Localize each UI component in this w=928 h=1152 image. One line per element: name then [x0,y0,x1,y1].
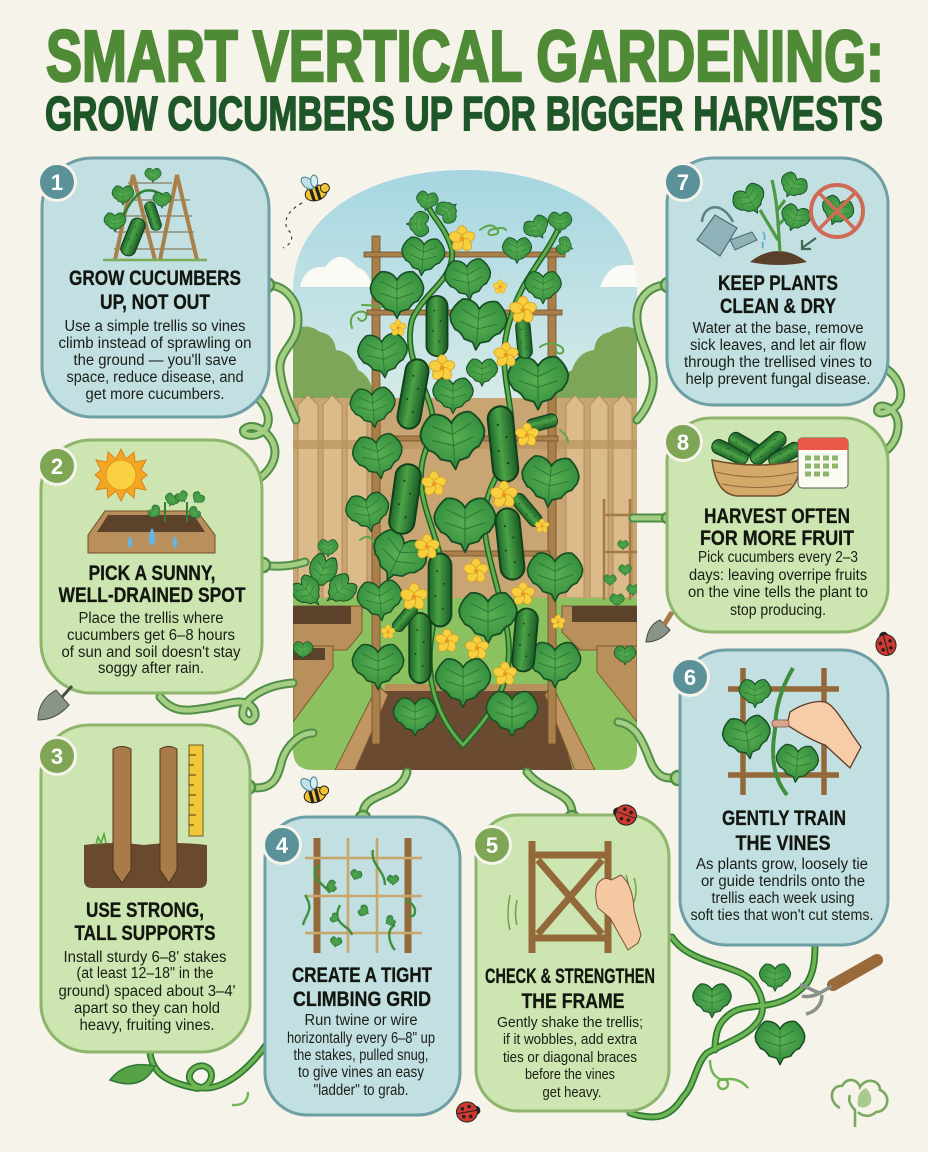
panel 7 [664,158,888,405]
icon: watering can, plant, no-disease sign [697,169,863,265]
panel 1 [38,158,269,417]
text block: if it wobbles, add extra [503,1032,638,1048]
heading: GENTLY TRAIN [722,806,846,830]
text block: heavy, fruiting vines. [80,1017,214,1034]
icon: sun and raised bed [88,449,215,553]
text block [287,1012,435,1099]
title [45,17,884,141]
badge 6: 6 [684,665,696,690]
text block: As plants grow, loosely tie [696,856,868,873]
text block [684,320,872,388]
connector vines [160,278,901,825]
text block: the stakes, pulled snug, [294,1047,428,1064]
heading [722,806,846,855]
text block: Place the trellis where [78,610,224,627]
heading: PICK A SUNNY, [88,561,216,585]
badge 1 [38,164,76,200]
panel 8 [664,418,888,632]
icon: stakes and ruler [84,745,207,888]
heading: WELL-DRAINED SPOT [58,583,246,607]
panel 4 [264,817,460,1115]
badge 7 [664,164,702,200]
badge 8: 8 [677,430,689,455]
cucumbers [388,296,559,683]
panel 5 [474,815,669,1111]
text block: sick leaves, and let air flow [690,337,867,354]
badge 5: 5 [486,833,498,858]
text block [497,1015,643,1101]
text block: get more cucumbers. [86,386,224,403]
icon: logo sprout [832,1080,887,1127]
text block: (at least 12–18" in the [76,965,214,982]
icon: trellis with cucumbers [103,168,207,260]
text block: space, reduce disease, and [66,369,244,386]
badge 7: 7 [677,170,689,195]
text block: cucumbers get 6–8 hours [67,627,235,644]
text block: the ground — you'll save [74,352,236,369]
panel 2 [38,440,262,693]
text block: of sun and soil doesn't stay [62,644,241,661]
heading [485,964,655,1013]
heading: UP, NOT OUT [100,290,210,314]
text block: Install sturdy 6–8' stakes [64,949,227,966]
badge 4: 4 [276,833,289,858]
panel 6 [672,650,888,945]
heading [74,898,216,945]
heading [700,504,854,550]
heading: CLEAN & DRY [720,294,836,318]
panel 3 [38,725,250,1052]
icon: hand tying vine to trellis [721,668,861,795]
text block: soft ties that won't cut stems. [690,907,874,924]
icon: trowel right [646,612,672,642]
trellis [364,236,565,744]
badge 8 [664,424,702,460]
icon: ladybug right [873,629,898,658]
text block: soggy after rain. [98,660,204,677]
heading: HARVEST OFTEN [704,504,850,528]
icon: twine grid [303,838,422,953]
heading: TALL SUPPORTS [74,921,216,945]
text block: Pick cucumbers every 2–3 [698,549,858,566]
icon: hand cultivator tool [800,960,877,1014]
tendrils [351,225,568,544]
heading: FOR MORE FRUIT [700,526,854,550]
text block: days: leaving overripe fruits [689,567,867,584]
icon: ladybug bottom [455,1100,482,1124]
text block [58,318,252,403]
badge 3: 3 [51,744,63,769]
icon: braced frame and hand [508,841,641,953]
badge 2 [38,448,76,484]
icon: trowel left [38,686,72,720]
icon: bee top with dotted trail [283,169,332,248]
heading [69,266,241,314]
text block: "ladder" to grab. [314,1082,408,1099]
leaves [344,190,583,737]
badge 4 [264,826,300,864]
heading [292,963,432,1011]
text block: Use a simple trellis so vines [64,318,246,335]
text block: horizontally every 6–8" up [287,1030,435,1047]
badge 2: 2 [51,454,63,479]
heading [58,561,246,607]
text block: through the trellised vines to [684,354,872,371]
text block: on the vine tells the plant to [688,584,868,601]
heading [718,271,838,318]
text block: ties or diagonal braces [503,1050,637,1066]
heading: THE VINES [736,831,830,855]
text block [688,549,868,619]
text block: trellis each week using [712,890,854,907]
vines [410,205,560,745]
text block: Water at the base, remove [692,320,864,337]
text block: Gently shake the trellis; [497,1015,643,1031]
text block: climb instead of sprawling on [58,335,252,352]
badge 5 [474,826,510,864]
flowers [380,226,566,686]
heading: THE FRAME [522,989,624,1013]
text block: apart so they can hold [74,1000,220,1017]
text block: before the vines [525,1067,615,1083]
text block: get heavy. [542,1085,602,1101]
heading: CLIMBING GRID [293,987,431,1011]
text block [690,856,874,924]
badge 3 [38,738,76,774]
text block: to give vines an easy [298,1064,424,1081]
text block: stop producing. [730,602,826,619]
central illustration: cucumber trellis in garden [288,170,639,770]
lower vines with leaves [110,937,815,1117]
heading: CHECK & STRENGTHEN [485,964,655,988]
text block: or guide tendrils onto the [701,873,865,890]
text block [62,610,241,677]
text block: Run twine or wire [304,1012,418,1029]
heading: CREATE A TIGHT [292,963,432,987]
heading: KEEP PLANTS [718,271,838,295]
text block [58,949,236,1034]
badge 6 [672,658,708,696]
text block: ground) spaced about 3–4' [58,983,236,1000]
heading: USE STRONG, [86,898,204,922]
icon: basket and calendar [710,429,848,496]
text block: help prevent fungal disease. [686,371,870,388]
icon: ladybug top of panel 5 [610,801,639,828]
badge 1: 1 [51,170,63,195]
heading: GROW CUCUMBERS [69,266,241,290]
icon: bee bottom [297,771,331,806]
